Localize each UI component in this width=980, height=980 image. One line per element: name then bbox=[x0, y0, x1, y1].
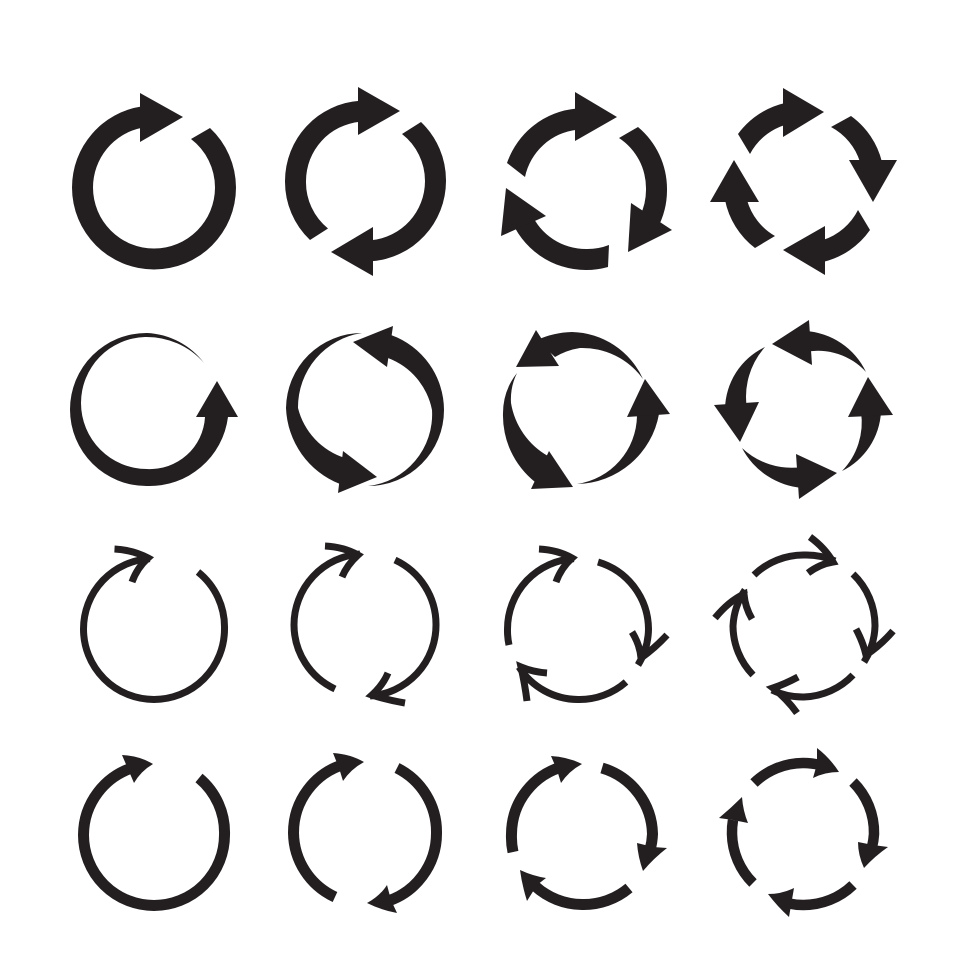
icon: medium ring, four arrows bbox=[719, 748, 888, 917]
icon: thin ring, four open arrows bbox=[715, 537, 893, 713]
icon: medium ring, two arrows bbox=[293, 753, 437, 913]
icon: thin ring, one open arrow bbox=[84, 549, 225, 700]
icon: thick ring, three arrows bbox=[501, 92, 672, 270]
icon: thin ring, two open arrows bbox=[294, 546, 436, 703]
icon: tapered ring, three arrows bbox=[503, 330, 670, 489]
icon: thick ring, one arrow bbox=[72, 93, 236, 270]
icon: tapered ring, one arrow bbox=[70, 333, 238, 486]
icon: tapered ring, two arrows bbox=[286, 326, 444, 493]
icon: thick ring, two arrows bbox=[285, 87, 446, 276]
icon: medium ring, three arrows bbox=[511, 756, 667, 905]
icon: tapered ring, four arrows bbox=[714, 320, 893, 499]
icon: medium ring, one arrow bbox=[84, 755, 225, 906]
icon: thin ring, three open arrows bbox=[507, 549, 667, 701]
icon: thick ring, four arrows bbox=[710, 88, 897, 275]
